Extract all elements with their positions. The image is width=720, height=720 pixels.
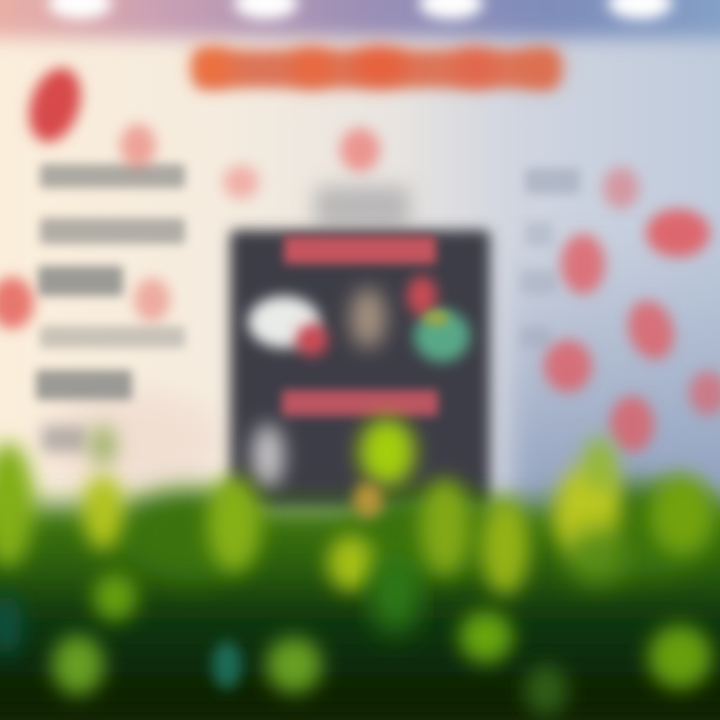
leaf: right tip <box>584 437 616 493</box>
leaf: bottom dim <box>524 664 568 716</box>
leaf: right of centre two <box>481 499 529 595</box>
foliage <box>0 418 720 720</box>
leaf: brown bud <box>353 482 383 518</box>
top banner with lights <box>0 0 720 38</box>
icon: white and red chart <box>248 296 328 356</box>
leaf: bottom right <box>648 625 712 689</box>
icon: small figure <box>350 288 386 348</box>
left red icons <box>0 61 170 329</box>
panel heading bar <box>284 236 436 264</box>
leaf: left edge <box>0 443 34 567</box>
leaf: centre dim <box>371 557 419 633</box>
leaf: left cluster <box>207 476 261 572</box>
leaf: right bright <box>545 458 629 562</box>
right red icons <box>544 167 720 452</box>
panel lower icon: white figure <box>252 424 284 488</box>
panel second heading bar <box>282 390 438 416</box>
leaf: right of centre <box>420 479 470 575</box>
leaf: left bright <box>83 474 123 550</box>
leaf: bottom left <box>52 635 104 695</box>
leaf: far right <box>650 475 714 555</box>
clipboard clip <box>314 186 410 228</box>
leaf: teal left edge <box>0 595 22 655</box>
leaf: centre tall bright <box>359 418 415 486</box>
leaf: right lower <box>568 528 624 584</box>
leaf: teal accent <box>212 641 242 689</box>
leaf: mid right low <box>459 611 513 663</box>
centre red icons <box>223 128 380 199</box>
icon: colourful pie <box>407 276 470 362</box>
right column text lines <box>520 168 580 348</box>
title <box>193 48 562 88</box>
leaf: lower left <box>93 573 137 621</box>
leaf: bottom centre <box>266 637 322 693</box>
dark central panel <box>230 230 490 510</box>
leaf: upper left faint <box>89 425 117 465</box>
leaf: centre bright low <box>327 535 375 591</box>
left column text lines <box>36 164 185 452</box>
